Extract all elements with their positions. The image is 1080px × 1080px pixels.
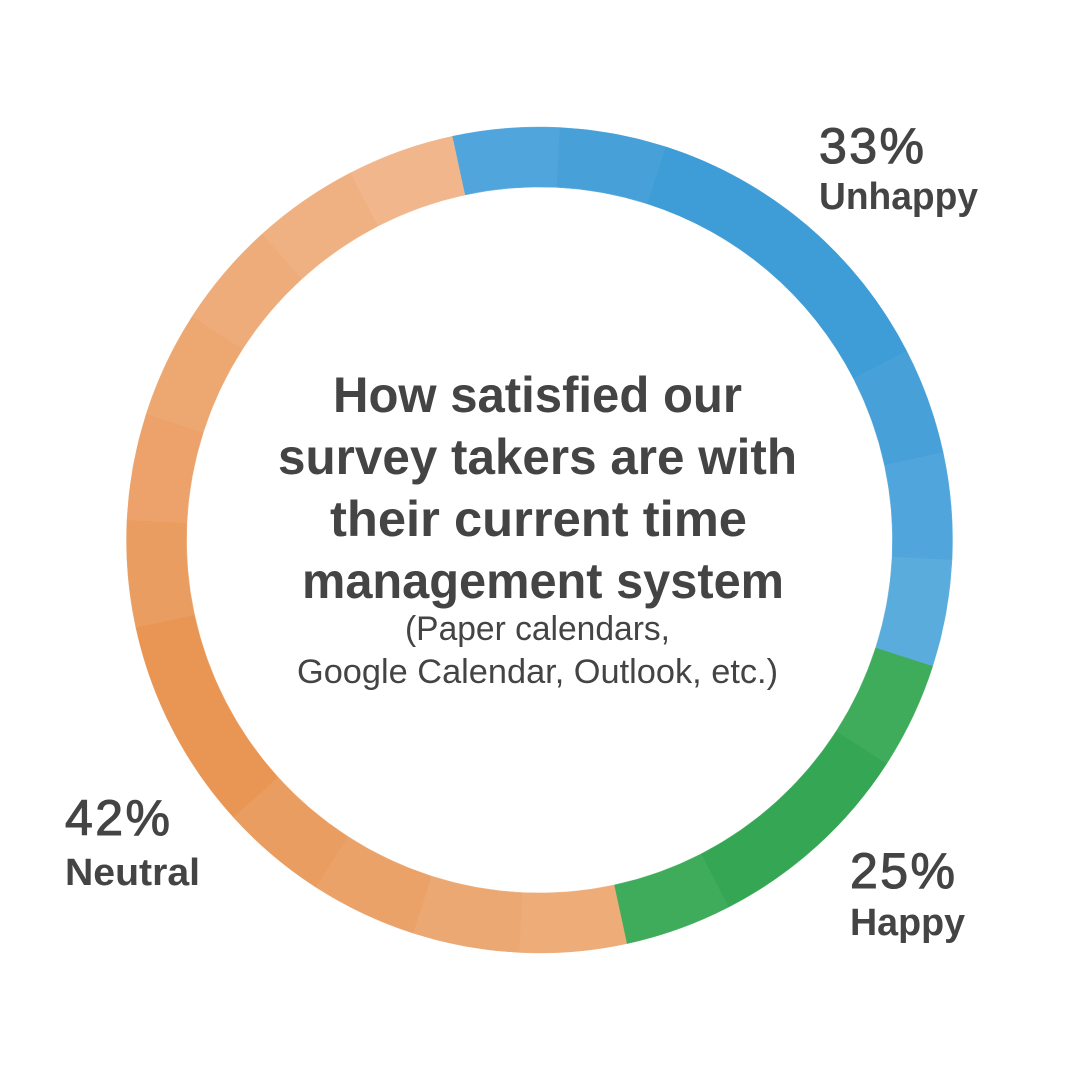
center subtext: (Paper calendars, bbox=[405, 610, 670, 648]
label: 33% unhappy bbox=[819, 118, 978, 218]
center heading: survey takers are with bbox=[278, 429, 797, 485]
label: 42% neutral bbox=[65, 790, 200, 894]
label: 25% happy: 25% bbox=[850, 843, 955, 899]
center heading: management system bbox=[302, 553, 784, 609]
center heading: How satisfied our bbox=[333, 367, 742, 423]
label: 25% happy bbox=[850, 843, 965, 944]
label: 33% unhappy: 33% bbox=[819, 118, 924, 174]
center subtext bbox=[297, 610, 778, 691]
label: 33% unhappy: Unhappy bbox=[819, 176, 978, 218]
center subtext: Google Calendar, Outlook, etc.) bbox=[297, 653, 778, 691]
label: 25% happy: Happy bbox=[850, 902, 965, 944]
donut arc: neutral 42% (orange) bbox=[126, 136, 627, 953]
label: 42% neutral: Neutral bbox=[65, 852, 200, 894]
center heading bbox=[278, 367, 797, 609]
label: 42% neutral: 42% bbox=[65, 790, 170, 846]
center heading: their current time bbox=[330, 491, 747, 547]
donut arc: unhappy 33% (blue) bbox=[452, 127, 953, 666]
donut arc: happy 25% (green) bbox=[614, 648, 933, 944]
